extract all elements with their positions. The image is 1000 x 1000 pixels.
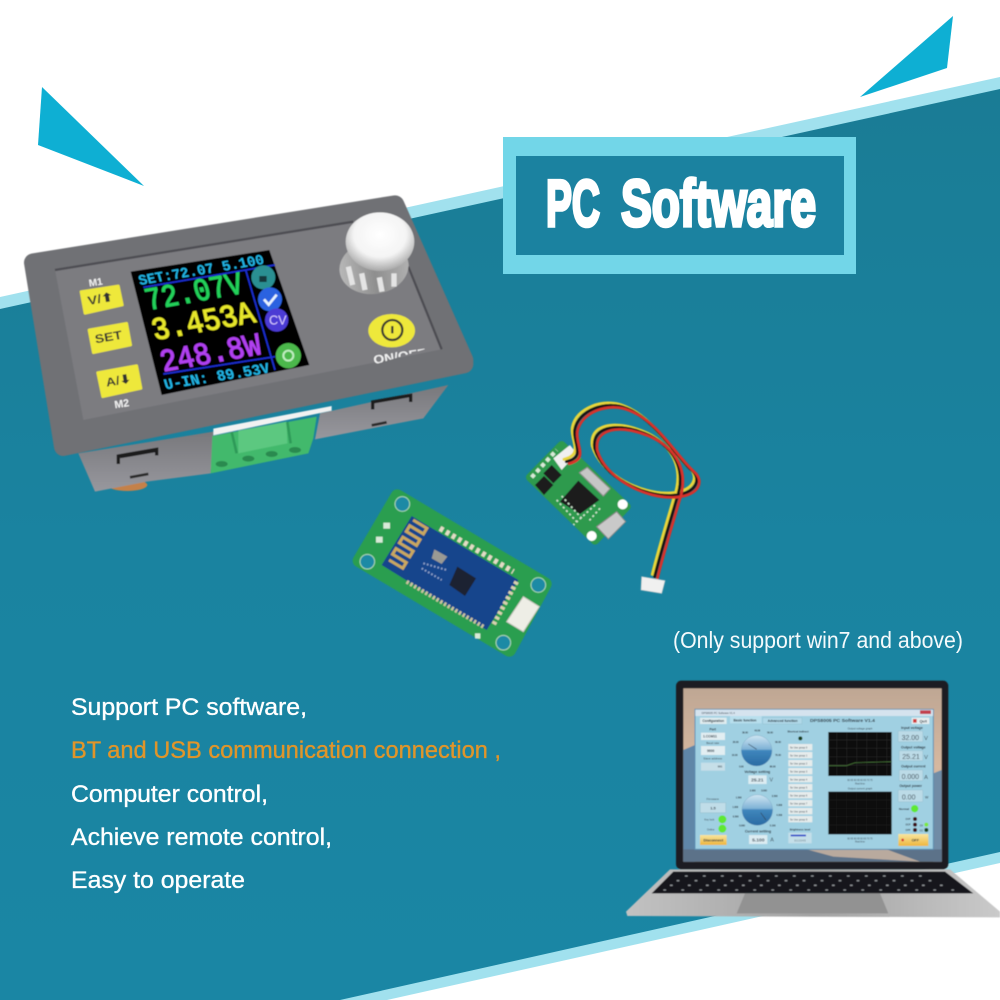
voltage dial: V bbox=[770, 778, 774, 784]
M1 label: M1 bbox=[88, 277, 104, 290]
voltage dial: 80.00 bbox=[770, 766, 776, 768]
OFF button: OFF bbox=[912, 838, 920, 842]
LCD screen: U-IN: 89.53V bbox=[162, 360, 273, 394]
button: SET bbox=[89, 323, 131, 353]
software window bbox=[695, 709, 933, 849]
on/off button: ON/OFF bbox=[372, 346, 427, 367]
current dial: 4.000 bbox=[776, 804, 783, 807]
voltage dial: 25.21 bbox=[751, 778, 764, 784]
orange coil under case bbox=[107, 479, 147, 491]
green carrier board bbox=[359, 496, 545, 650]
tabs and header bbox=[700, 716, 929, 724]
LCD screen: 72.07V bbox=[141, 268, 248, 320]
voltage graph: 60 65 60 65 60 65 70 75 bbox=[847, 780, 873, 782]
decorative triangle: top left bbox=[38, 87, 144, 186]
M2 label: M2 bbox=[114, 397, 130, 411]
voltage dial: 60.00 bbox=[775, 742, 782, 744]
voltage graph: Output voltage graph bbox=[848, 726, 873, 730]
case sides bbox=[78, 385, 448, 492]
group shortcut buttons: Brightness level bbox=[790, 828, 811, 832]
button: SET: SET bbox=[94, 328, 124, 346]
status LEDs: CC bbox=[920, 830, 923, 832]
group shortcut buttons: Se Use group 8 bbox=[790, 810, 808, 813]
button: V up: V/⬆ bbox=[86, 290, 114, 308]
green terminal block bbox=[211, 406, 332, 473]
left column: Port bbox=[709, 727, 717, 731]
readouts: 25.21 bbox=[902, 754, 920, 761]
feature: BT and USB: BT and USB communication connection , bbox=[71, 737, 501, 764]
current dial: 5.100 bbox=[770, 826, 776, 828]
current dial: A bbox=[770, 837, 774, 843]
status LEDs: OVP bbox=[906, 819, 911, 821]
voltage dial: 20.00 bbox=[733, 742, 739, 744]
readouts: Output current bbox=[901, 764, 926, 768]
tabs and header: Advanced function bbox=[768, 719, 798, 723]
blue BT module bbox=[382, 516, 518, 630]
readouts: V bbox=[924, 736, 928, 742]
laptop base bbox=[626, 869, 1000, 917]
left column: 1.5 bbox=[710, 805, 717, 810]
current dial: 4.500 bbox=[776, 814, 783, 817]
rotary knob bbox=[336, 212, 414, 299]
readouts: A bbox=[924, 775, 928, 781]
USB circuit board bbox=[530, 445, 628, 541]
current graph bbox=[828, 786, 892, 844]
voltage dial: 10.00 bbox=[732, 755, 738, 757]
left column: Online bbox=[707, 827, 715, 831]
feature: remote control: Achieve remote control, bbox=[71, 824, 332, 851]
note: OS support: (Only support win7 and above) bbox=[673, 627, 963, 653]
group shortcut buttons: Shortcut indirect bbox=[787, 729, 809, 733]
readouts: w bbox=[925, 795, 929, 800]
current dial bbox=[732, 791, 783, 844]
current dial: 0.000 bbox=[739, 826, 746, 828]
current dial: 2.000 bbox=[750, 791, 756, 793]
left column bbox=[700, 727, 727, 845]
white socket bbox=[507, 597, 539, 632]
readouts: Output voltage bbox=[901, 745, 926, 749]
LCD screen bbox=[131, 250, 309, 395]
status LEDs bbox=[905, 817, 928, 832]
title banner: Software bbox=[621, 166, 816, 240]
group shortcut buttons: 0 1 2 3 4 5 bbox=[794, 841, 806, 843]
voltage dial: 0.00 bbox=[739, 766, 744, 768]
current graph: Output current graph bbox=[848, 786, 873, 790]
current dial: 0.500 bbox=[733, 817, 739, 819]
voltage dial bbox=[732, 729, 782, 784]
product: USB adapter with cable bbox=[530, 403, 699, 593]
left column: 9600 bbox=[707, 749, 715, 753]
voltage graph bbox=[828, 726, 892, 785]
LCD screen: 3.453A bbox=[148, 297, 260, 350]
group shortcut buttons: Se Use group 5 bbox=[790, 786, 808, 789]
LCD screen: 248.8W bbox=[156, 329, 266, 381]
left column: Disconnect bbox=[703, 838, 724, 842]
title banner bbox=[503, 137, 856, 274]
title banner: PC bbox=[546, 166, 600, 240]
software window: DPS8005 PC Software V1.4 bbox=[702, 711, 735, 715]
front bezel bbox=[33, 205, 464, 447]
group shortcut buttons: Se Use group 6 bbox=[790, 794, 808, 797]
group shortcut buttons bbox=[787, 729, 812, 843]
wallpaper bbox=[683, 688, 942, 862]
readouts: Output power bbox=[899, 784, 923, 788]
feature: easy to operate: Easy to operate bbox=[71, 867, 245, 894]
current dial: 1.500 bbox=[736, 798, 742, 800]
tabs and header: Configuration bbox=[702, 719, 724, 723]
status LEDs: OCP bbox=[905, 825, 911, 827]
status LEDs: OPP bbox=[906, 830, 911, 832]
readouts: Input voltage bbox=[901, 726, 923, 730]
LCD screen: CV bbox=[269, 314, 287, 328]
current dial: 3.500 bbox=[772, 796, 778, 798]
readouts: V bbox=[924, 755, 928, 761]
current dial: 1.000 bbox=[732, 807, 739, 809]
laptop with PC software bbox=[626, 681, 1000, 917]
feature list bbox=[71, 694, 501, 894]
current dial: 3.000 bbox=[761, 791, 768, 793]
voltage dial: 40.00 bbox=[754, 729, 761, 732]
lid bbox=[676, 681, 948, 869]
decorative triangle: top right bbox=[860, 16, 953, 97]
voltage dial: 30.00 bbox=[742, 732, 749, 734]
readouts: 0.00 bbox=[902, 794, 916, 801]
current graph: 60 65 60 65 60 65 70 75 bbox=[847, 838, 873, 840]
voltage dial: 50.00 bbox=[767, 732, 774, 734]
readouts: Normal bbox=[899, 807, 909, 811]
group shortcut buttons: Se Use group 9 bbox=[790, 818, 808, 821]
feature: computer control: Computer control, bbox=[71, 781, 268, 808]
readouts: 32.00 bbox=[902, 735, 919, 742]
recessed panel bbox=[55, 215, 442, 420]
group shortcut buttons: Se Use group 1 bbox=[790, 754, 808, 757]
current dial: Current setting bbox=[745, 829, 771, 833]
button: A down bbox=[98, 366, 141, 397]
button: A down: A/⬇ bbox=[105, 371, 132, 390]
wire loop bbox=[564, 403, 699, 579]
status LEDs: CV bbox=[920, 825, 923, 827]
silkscreen marks bbox=[376, 523, 480, 639]
LCD screen: SET:72.07 5.100 bbox=[137, 253, 266, 290]
product: DPS power supply module bbox=[33, 205, 464, 492]
readouts bbox=[898, 726, 929, 812]
voltage graph: Real time bbox=[855, 782, 866, 785]
group shortcut buttons: Se Use group 2 bbox=[790, 762, 808, 765]
group shortcut buttons: Se Use group 3 bbox=[790, 770, 808, 773]
left column: 1.COM11 bbox=[703, 735, 717, 739]
OFF button bbox=[898, 834, 928, 846]
tabs and header: DPS8005 PC Software V1.4 bbox=[810, 718, 876, 723]
feature: PC software: Support PC software, bbox=[71, 694, 307, 721]
voltage dial: Voltage setting bbox=[744, 770, 770, 774]
current graph: Real time bbox=[855, 841, 866, 844]
tabs and header: Basic function bbox=[734, 718, 756, 722]
voltage dial: 70.00 bbox=[775, 755, 782, 757]
tabs and header: Quit bbox=[920, 719, 928, 723]
on/off button bbox=[368, 314, 427, 367]
readouts: 0.000 bbox=[902, 774, 919, 781]
left column: Baud rate bbox=[706, 741, 719, 745]
button: V up bbox=[81, 286, 122, 313]
cable connector bbox=[641, 577, 665, 593]
left column: Slave address bbox=[703, 757, 723, 761]
product: Bluetooth module board bbox=[359, 496, 546, 650]
left column: 001 bbox=[718, 765, 723, 769]
current dial: 5.100 bbox=[752, 837, 765, 843]
group shortcut buttons: Se Use group 4 bbox=[790, 778, 808, 781]
group shortcut buttons: Se Use group 0 bbox=[790, 746, 808, 749]
group shortcut buttons: Se Use group 7 bbox=[790, 802, 808, 805]
left column: Key lock bbox=[704, 818, 715, 822]
left column: Firmware bbox=[706, 797, 719, 801]
